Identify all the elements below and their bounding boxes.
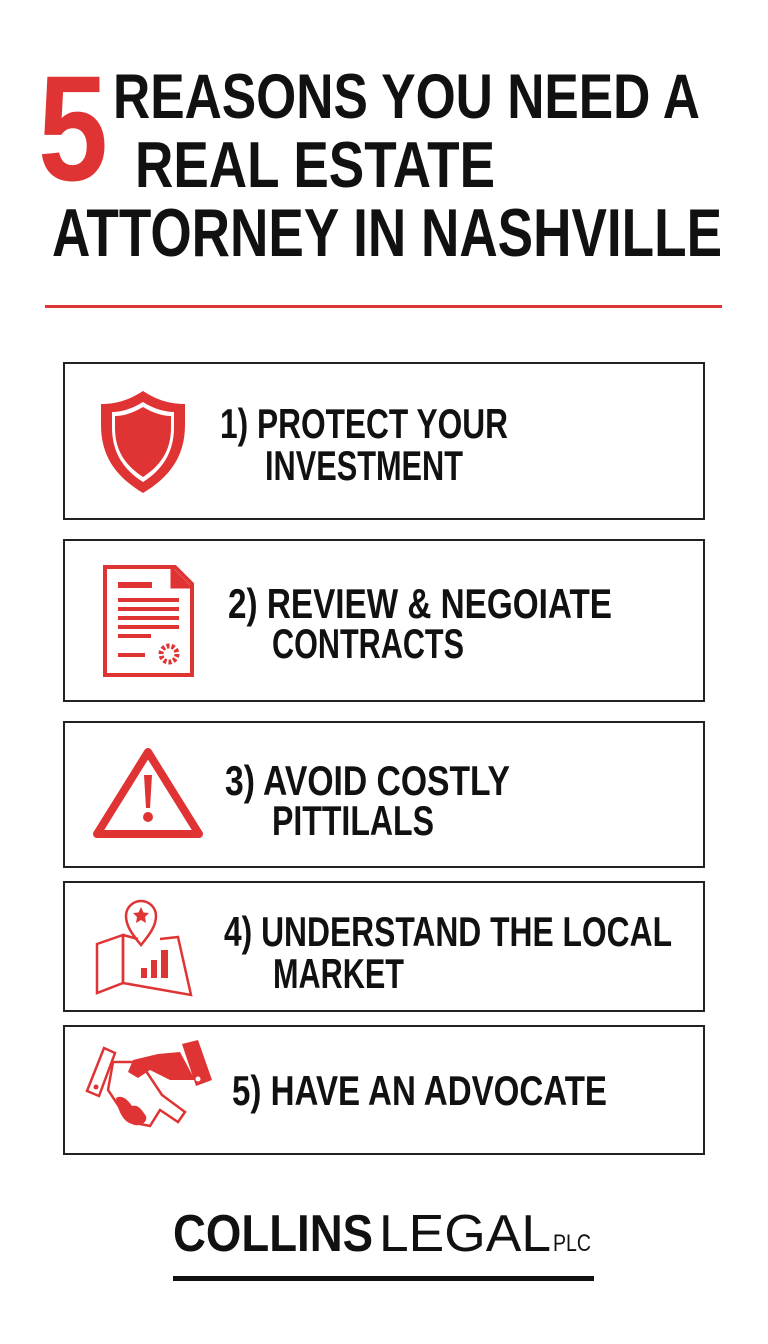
title number 5: 5 bbox=[38, 44, 108, 212]
text: item 5: 5) HAVE AN ADVOCATE bbox=[232, 1067, 607, 1114]
icon: handshake bbox=[87, 1040, 212, 1126]
panel: item 1 bbox=[64, 363, 704, 519]
icon: map with pin bbox=[97, 901, 191, 995]
panel: item 3: PITTILALS bbox=[272, 797, 434, 844]
logo: Collins Legal PLC: COLLINS bbox=[173, 1205, 373, 1263]
panel: item 3 bbox=[64, 722, 704, 867]
panel: item 1: INVESTMENT bbox=[265, 442, 463, 489]
logo: Collins Legal PLC: LEGAL bbox=[379, 1205, 551, 1263]
icon: contract document bbox=[105, 567, 192, 675]
text: item 1: 1) PROTECT YOUR bbox=[220, 400, 508, 447]
panel: item 4 bbox=[64, 882, 704, 1011]
text: item 3: 3) AVOID COSTLY bbox=[225, 757, 510, 804]
panel: item 2 bbox=[64, 540, 704, 701]
panel: item 4: MARKET bbox=[273, 950, 404, 997]
panel: item 5 bbox=[64, 1026, 704, 1154]
logo: Collins Legal PLC: PLC bbox=[553, 1230, 591, 1257]
icon: shield bbox=[101, 391, 185, 493]
title line 2: REAL ESTATE bbox=[135, 128, 495, 201]
title bbox=[38, 44, 722, 271]
text: item 2: 2) REVIEW & NEGOIATE bbox=[228, 580, 612, 627]
logo: Collins Legal PLC bbox=[173, 1205, 594, 1281]
icon: warning bbox=[97, 752, 199, 834]
panel: item 2: CONTRACTS bbox=[272, 620, 464, 667]
